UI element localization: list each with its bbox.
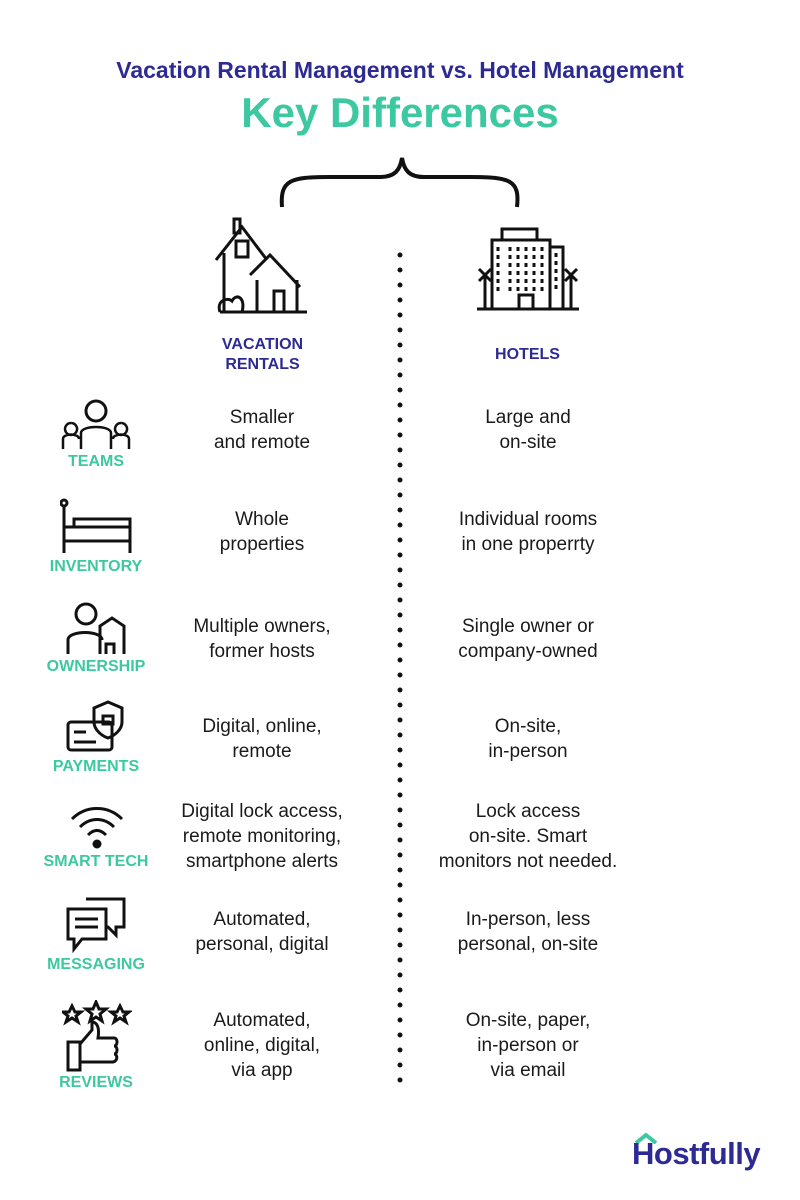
- brace: [280, 158, 520, 208]
- text: vr ownership: Multiple owners,: [193, 616, 331, 637]
- icon: thumbs up and stars: [62, 1000, 132, 1072]
- row: messaging: [47, 898, 598, 973]
- subtitle: Key Differences: [241, 89, 559, 136]
- text: hotel messaging: [458, 909, 598, 955]
- text: hotel teams: Large and: [485, 407, 571, 428]
- label: teams: TEAMS: [68, 453, 124, 470]
- heading: hotels: HOTELS: [495, 346, 560, 363]
- text: hotel smart tech: on-site. Smart: [469, 826, 587, 847]
- text: hotel reviews: in-person or: [477, 1035, 579, 1056]
- text: hotel ownership: [458, 616, 598, 662]
- text: hotel smart tech: monitors not needed.: [439, 851, 617, 872]
- icon: bed: [60, 498, 132, 553]
- text: vr teams: [214, 407, 310, 453]
- text: vr payments: [202, 716, 322, 762]
- row: payments: [53, 700, 568, 775]
- text: hotel payments: in-person: [488, 741, 568, 762]
- icon: chat: [66, 898, 126, 953]
- text: vr messaging: [195, 909, 329, 955]
- text: hotel messaging: In-person, less: [466, 909, 590, 930]
- row: smart tech: [44, 801, 617, 872]
- heading: vacation rentals: VACATION: [222, 336, 303, 353]
- label: ownership: OWNERSHIP: [47, 658, 145, 675]
- text: vr smart tech: smartphone alerts: [186, 851, 338, 872]
- text: vr messaging: Automated,: [213, 909, 311, 930]
- icon: hotel: [477, 228, 579, 310]
- text: vr reviews: Automated,: [213, 1010, 311, 1031]
- text: vr messaging: personal, digital: [195, 934, 329, 955]
- label: messaging: MESSAGING: [47, 956, 145, 973]
- text: vr smart tech: [181, 801, 343, 872]
- dotted divider: [398, 252, 402, 1082]
- text: hotel payments: On-site,: [495, 716, 561, 737]
- row: teams: [62, 400, 571, 470]
- label: inventory: INVENTORY: [50, 558, 142, 575]
- text: vr inventory: Whole: [235, 509, 289, 530]
- logo: hostfully: Hostfully: [632, 1136, 760, 1171]
- heading: vacation rentals: [222, 336, 303, 373]
- text: vr payments: remote: [232, 741, 292, 762]
- text: vr inventory: properties: [220, 534, 304, 555]
- text: vr ownership: former hosts: [209, 641, 315, 662]
- row: reviews: [59, 1000, 590, 1091]
- text: hotel reviews: via email: [490, 1060, 565, 1081]
- text: vr smart tech: remote monitoring,: [183, 826, 341, 847]
- icon: wifi: [71, 807, 123, 848]
- text: vr teams: and remote: [214, 432, 310, 453]
- heading: vacation rentals: RENTALS: [225, 356, 300, 373]
- label: smart tech: SMART TECH: [44, 853, 148, 870]
- text: hotel payments: [488, 716, 568, 762]
- row: ownership: [47, 602, 598, 675]
- text: hotel ownership: company-owned: [458, 641, 598, 662]
- icon: team: [62, 400, 130, 449]
- icon: card: [66, 700, 124, 752]
- text: vr payments: Digital, online,: [202, 716, 322, 737]
- label: payments: PAYMENTS: [53, 758, 139, 775]
- text: hotel ownership: Single owner or: [462, 616, 594, 637]
- title: Vacation Rental Management vs. Hotel Management: [116, 57, 684, 83]
- text: hotel smart tech: [439, 801, 617, 872]
- text: hotel reviews: [466, 1010, 590, 1081]
- text: vr ownership: [193, 616, 331, 662]
- row: inventory: [50, 498, 597, 575]
- text: vr reviews: [204, 1010, 320, 1081]
- text: vr inventory: [220, 509, 304, 555]
- icon: house: [214, 218, 307, 314]
- text: vr smart tech: Digital lock access,: [181, 801, 343, 822]
- text: hotel messaging: personal, on-site: [458, 934, 598, 955]
- text: hotel inventory: Individual rooms: [459, 509, 597, 530]
- text: hotel inventory: [459, 509, 597, 555]
- text: vr reviews: via app: [231, 1060, 293, 1081]
- label: reviews: REVIEWS: [59, 1074, 133, 1091]
- text: hotel teams: [485, 407, 571, 453]
- text: vr reviews: online, digital,: [204, 1035, 320, 1056]
- text: vr teams: Smaller: [230, 407, 294, 428]
- text: hotel reviews: On-site, paper,: [466, 1010, 590, 1031]
- icon: owner: [66, 602, 126, 654]
- text: hotel smart tech: Lock access: [476, 801, 580, 822]
- text: hotel inventory: in one properrty: [461, 534, 595, 555]
- text: hotel teams: on-site: [499, 432, 557, 453]
